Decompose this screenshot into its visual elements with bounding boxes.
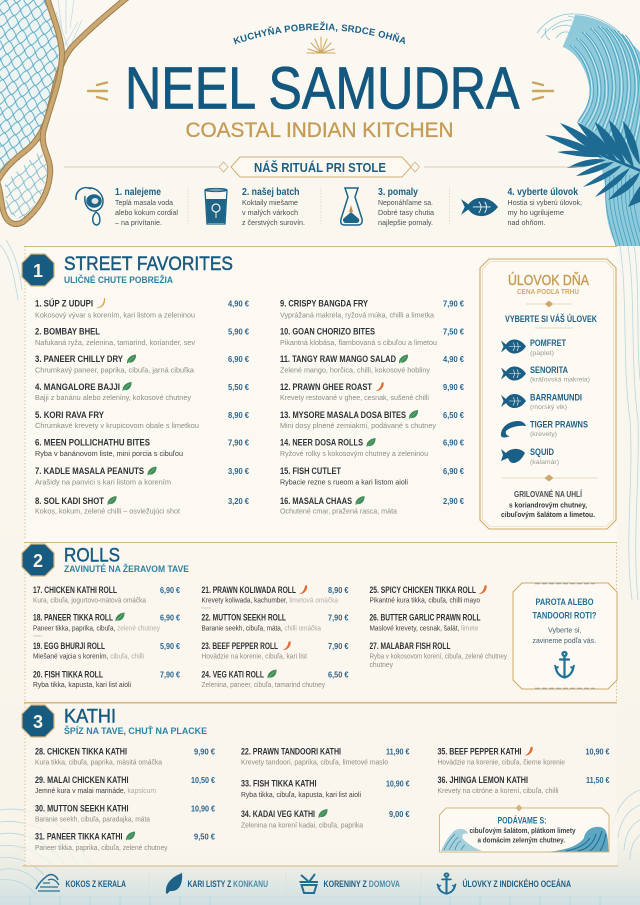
item 29 — [35, 775, 215, 795]
ritual banner — [64, 157, 584, 177]
badge 2: 2 — [33, 551, 43, 571]
item 4: 5,50 € — [228, 383, 249, 392]
catch: pomfret — [501, 338, 566, 357]
item 16: 2,90 € — [443, 497, 464, 506]
item 12: Krevety restované v ghee, cesnak, sušené chilli — [280, 395, 429, 402]
callout: served with: PODÁVAME S: — [498, 816, 546, 826]
title ornament right — [533, 82, 553, 100]
item 32: 22. PRAWN TANDOORI KATHI — [241, 746, 341, 756]
item 25 — [370, 585, 487, 604]
item 4: 4. MANGALORE BAJJI — [35, 382, 120, 392]
step 1: Teplá masala voda — [115, 200, 173, 207]
item 2: 2. BOMBAY BHEL — [35, 326, 101, 336]
item 33: 33. FISH TIKKA KATHI — [241, 778, 316, 788]
item 36: Krevety na citróne a korení, cibuľa, chilli — [438, 788, 559, 795]
item 15 — [280, 466, 464, 486]
item 14: 6,90 € — [443, 438, 464, 448]
item 22: Baranie seekh, cibuľa, mäta, chilli omáčka — [202, 626, 321, 632]
item 7: 3,90 € — [228, 467, 249, 476]
item 25: 25. SPICY CHICKEN TIKKA ROLL — [370, 585, 476, 595]
item 5 — [35, 410, 249, 430]
step 1: – na privítanie. — [115, 220, 162, 227]
item 18 — [33, 612, 180, 638]
callout: served with: a domácim zeleným chutney. — [478, 836, 565, 844]
grilled note: cibuľovým šalátom a limetou. — [501, 510, 595, 519]
subheading: ŠPÍZ NA TAVE, CHUŤ NA PLACKE — [64, 725, 207, 736]
heading: catch of the day: ÚLOVOK DŇA — [508, 272, 589, 289]
item 36: 36. JHINGA LEMON KATHI — [438, 775, 528, 785]
item 24 — [202, 670, 349, 689]
step 2: z čerstvých surovín. — [242, 220, 305, 227]
icon: anchor — [554, 652, 574, 678]
step 4 — [461, 187, 582, 227]
item 36 — [438, 775, 610, 795]
item 17: Kura, cibuľa, jogurtovo-mätová omáčka — [33, 598, 146, 604]
subheading: ZAVINUTÉ NA ŽERAVOM TAVE — [64, 563, 189, 574]
item 31 — [35, 832, 215, 852]
callout: parota or roti: Vyberte si, — [548, 626, 582, 634]
catch: squid: SQUID — [530, 447, 554, 457]
item 11 — [280, 354, 464, 374]
item 24: 24. VEG KATI ROLL — [202, 670, 264, 680]
item 9: 7,90 € — [443, 300, 464, 308]
title: NEEL SAMUDRA — [125, 56, 520, 122]
icon: carafe — [341, 188, 362, 225]
item 2: Nafukaná ryža, zelenina, tamarind, koriander, sev — [35, 340, 196, 347]
panel: rolls — [22, 542, 618, 894]
heading: rolls: ROLLS — [64, 546, 120, 566]
item 32 — [241, 746, 410, 766]
item 23: Hovädzie na korenie, cibuľa, kari list — [202, 654, 307, 660]
item 13: 13. MYSORE MASALA DOSA BITES — [280, 410, 406, 420]
item 1: Kokosový vývar s korením, kari listom a zeleninou — [35, 312, 195, 320]
item 32: 11,90 € — [386, 748, 410, 756]
item 15: 6,90 € — [443, 467, 464, 476]
catch: senorita: SENORITA — [530, 365, 568, 375]
item 28: 28. CHICKEN TIKKA KATHI — [35, 746, 127, 756]
tagline: KUCHYŇA POBREŽIA, SRDCE OHŇA — [233, 22, 405, 44]
item 29: 10,50 € — [191, 776, 215, 785]
decoration: rope — [0, 0, 128, 224]
item 10: 10. GOAN CHORIZO BITES — [280, 326, 375, 336]
item 29: Jemné kura v malai marináde, kapsicum — [35, 788, 156, 795]
badge 2 — [22, 544, 54, 576]
step 1: alebo kokum cordial — [115, 210, 178, 217]
item 8: 3,20 € — [228, 497, 249, 506]
panel: kathi — [22, 703, 618, 866]
item 18: Paneer tikka, paprika, cibuľa, zelené chutney — [33, 626, 161, 632]
step 3: najlepšie pomaly. — [378, 220, 433, 227]
item 6: 6. MEEN POLLICHATHU BITES — [35, 438, 150, 448]
item 7: 7. KADLE MASALA PEANUTS — [35, 466, 144, 476]
item 36: 11,50 € — [586, 776, 610, 785]
item 12: 9,90 € — [443, 383, 464, 392]
item 34: Zelenina na korení kadai, cibuľa, paprika — [241, 822, 363, 830]
callout: parota or roti: PAROTA ALEBO — [536, 597, 594, 607]
icon: mortar — [300, 874, 318, 893]
catch: tiger prawns: (krevety) — [530, 431, 557, 438]
item 13: 6,50 € — [443, 411, 464, 420]
item 33: 10,90 € — [386, 780, 410, 788]
item 14: 14. NEER DOSA ROLLS — [280, 438, 363, 448]
subheading: ULIČNÉ CHUTE POBREŽIA — [64, 274, 173, 285]
badge 1: 1 — [33, 261, 43, 281]
catch: barramundi: BARRAMUNDI — [530, 392, 582, 402]
grilled note: GRILOVANÉ NA UHLÍ — [514, 490, 583, 499]
panel: street favorites — [22, 246, 617, 542]
item 33: Ryba tikka, cibuľa, kapusta, kari list aioli — [241, 792, 361, 799]
item 27 — [370, 641, 507, 669]
item 19 — [33, 641, 180, 660]
item 10 — [280, 326, 464, 347]
item 3: 6,90 € — [228, 355, 249, 364]
item 1: 4,90 € — [228, 300, 249, 308]
item 23 — [202, 641, 349, 660]
step 4: my ho ugrilujeme — [508, 210, 564, 217]
step 4: nad ohňom. — [508, 220, 546, 227]
item 6: Ryba v banánovom liste, mini porcia s cibuľou — [35, 451, 183, 458]
catch: pomfret: (paplet) — [530, 350, 554, 357]
item 35 — [438, 746, 610, 766]
item 23: 7,90 € — [328, 642, 349, 651]
item 8: 8. SOL KADI SHOT — [35, 496, 105, 506]
step 3: Neponáhľame sa. — [378, 200, 433, 207]
item 12 — [280, 382, 464, 402]
item 31: 9,50 € — [194, 832, 215, 842]
item 5: Chrumkavé krevety v krupicovom obale s limetkou — [35, 423, 199, 430]
market price note: CENA PODĽA TRHU — [517, 289, 579, 296]
item 11: Zelené mango, horčica, chilli, kokosové hobliny — [280, 368, 431, 374]
step 4: 4. vyberte úlovok — [508, 187, 578, 198]
heading: kathi: KATHI — [64, 706, 116, 728]
catch: senorita — [501, 365, 590, 384]
item 21: Krevety koliwada, kachumber, limetová omáčka — [202, 598, 338, 604]
wave illustration left — [441, 829, 482, 851]
step 3: 3. pomaly — [378, 187, 418, 198]
item 34 — [241, 809, 410, 830]
item 18: Naan — [33, 633, 43, 638]
item 21: 8,90 € — [328, 586, 349, 595]
item 20: 7,90 € — [160, 670, 180, 680]
item 16: Ochutené cmar, pražená rasca, mäta — [280, 508, 397, 516]
item 6: 7,90 € — [228, 438, 249, 448]
footer: origins strip — [36, 872, 572, 894]
item 27: 27. MALABAR FISH ROLL — [370, 641, 451, 651]
item 21: 21. PRAWN KOLIWADA ROLL — [202, 585, 296, 595]
item 7: Arašidy na panvici s kari listom a korením — [35, 480, 171, 486]
catch: pomfret: POMFRET — [530, 338, 566, 348]
item 30: 10,90 € — [191, 804, 215, 814]
badge 1 — [22, 254, 54, 286]
subtitle: COASTAL INDIAN KITCHEN — [186, 119, 454, 142]
item 19: 19. EGG BHURJI ROLL — [33, 641, 105, 651]
callout: served with — [440, 804, 609, 852]
step 1 — [76, 187, 178, 227]
item 10: Pikantná klobása, flambovaná s cibuľou a limetou — [280, 340, 437, 347]
item 5: 5. KORI RAVA FRY — [35, 410, 104, 420]
item 35: 10,90 € — [586, 748, 610, 756]
icon: curry leaf — [166, 873, 182, 894]
item 6 — [35, 438, 249, 458]
item 20 — [33, 670, 180, 689]
item 17: 17. CHICKEN KATHI ROLL — [33, 585, 117, 595]
item 18: 6,90 € — [160, 614, 180, 622]
item 33 — [241, 778, 410, 799]
item 22 — [202, 612, 349, 632]
badge 3: 3 — [33, 712, 43, 732]
item 29: 29. MALAI CHICKEN KATHI — [35, 775, 128, 785]
step 3: Dobré tasy chutia — [378, 210, 434, 217]
panel: catch of the day — [480, 259, 616, 529]
label: konkan: KARI LISTY Z KONKANU — [188, 879, 268, 889]
item 32: Krevety tandoori, paprika, cibuľa, limetové maslo — [241, 760, 388, 766]
grilled note — [501, 490, 595, 519]
item 9: Vyprážaná makrela, ryžová múka, chilli a limetka — [280, 312, 434, 320]
callout: parota or roti: TANDOORI ROTI? — [532, 610, 597, 620]
step 3 — [341, 187, 434, 227]
item 22: 7,90 € — [328, 614, 349, 622]
item 5: 8,90 € — [228, 411, 249, 420]
item 4: Bajji z banánu alebo zeleniny, kokosové chutney — [35, 395, 192, 402]
item 9 — [280, 298, 464, 320]
item 19: Miešané vajcia s korením, cibuľa, chilli — [33, 654, 144, 660]
item 28: Kura tikka, cibuľa, paprika, mäsitá omáčka — [35, 760, 162, 766]
item 11: 4,90 € — [443, 355, 464, 364]
item 26 — [370, 612, 481, 632]
item 12: 12. PRAWN GHEE ROAST — [280, 382, 373, 392]
step 1: 1. nalejeme — [115, 187, 161, 198]
item 16: 16. MASALA CHAAS — [280, 496, 352, 506]
item 24: Zelenina, paneer, cibuľa, tamarind chutney — [202, 682, 326, 689]
decoration: palm leaf — [545, 120, 640, 207]
decoration: margin wave lines — [0, 240, 640, 905]
icon: fish — [461, 198, 498, 216]
item 3: 3. PANEER CHILLY DRY — [35, 354, 123, 364]
item 28 — [35, 746, 215, 766]
item 35: Hovädzie na korenie, cibuľa, čierne korenie — [438, 760, 565, 766]
icon: footer anchor — [437, 873, 456, 894]
catch: barramundi: (morský vlk) — [530, 404, 567, 411]
item 19: 5,90 € — [160, 642, 180, 651]
item 20: Ryba tikka, kapusta, kari list aioli — [33, 682, 131, 689]
icon: glass — [205, 188, 227, 224]
item 30 — [35, 804, 215, 824]
item 2: 5,90 € — [228, 328, 249, 336]
item 15: 15. FISH CUTLET — [280, 466, 342, 476]
item 30: Baranie seekh, cibuľa, paradajka, mäta — [35, 816, 150, 824]
catch: squid — [501, 447, 559, 466]
item 34: 9,00 € — [389, 810, 410, 819]
item 3 — [35, 354, 249, 374]
callout: parota or roti — [513, 583, 617, 689]
step 2: v malých várkoch — [242, 210, 298, 217]
label: kerala: KOKOS Z KERALA — [66, 879, 126, 889]
item 27: Ryba v kokosovom korení, cibuľa, zelené chutney — [370, 654, 507, 660]
icon: pouring vessel — [76, 188, 103, 225]
item 31: 31. PANEER TIKKA KATHI — [35, 832, 122, 842]
icon: coconut wave — [36, 875, 60, 891]
item 20: 20. FISH TIKKA ROLL — [33, 670, 103, 680]
title ornament left — [88, 82, 107, 100]
heading: street favorites: STREET FAVORITES — [64, 254, 233, 275]
callout: served with: cibuľovým šalátom, plátkom limety — [470, 826, 576, 835]
icon: gold sunburst — [307, 37, 335, 53]
item 22: 22. MUTTON SEEKH ROLL — [202, 612, 286, 622]
item 14 — [280, 438, 464, 458]
step 2: 2. našej batch — [242, 187, 300, 198]
step 4: Hostia si vyberú úlovok, — [508, 200, 582, 207]
item 8 — [35, 496, 249, 516]
item 13 — [280, 410, 464, 430]
label: ocean: ÚLOVKY Z INDICKÉHO OCEÁNA — [462, 878, 572, 889]
item 15: Rybacie rezne s rueom a kari listom aioli — [280, 480, 408, 486]
catch: tiger prawns: TIGER PRAWNS — [530, 420, 588, 430]
item 27: chutney — [370, 662, 394, 669]
decoration: fishing net — [0, 0, 82, 220]
item 2 — [35, 326, 249, 347]
catch: barramundi — [501, 392, 582, 411]
catch: senorita: (kráľovská makrela) — [530, 376, 590, 384]
item 34: 34. KADAI VEG KATHI — [241, 809, 315, 819]
step 2: Koktaily miešame — [242, 200, 298, 207]
ritual banner: NÁŠ RITUÁL PRI STOLE — [254, 160, 386, 175]
item 17 — [33, 585, 180, 604]
item 1: 1. SÚP Z UDUPI — [35, 298, 93, 308]
item 30: 30. MUTTON SEEKH KATHI — [35, 804, 128, 814]
catch: tiger prawns — [501, 420, 588, 438]
item 21: Naan — [202, 605, 211, 610]
item 9: 9. CRISPY BANGDA FRY — [280, 298, 368, 308]
badge 3 — [22, 705, 54, 737]
callout: parota or roti: zavineme podľa vás. — [532, 636, 596, 645]
grilled note: s koriandrovým chutney, — [509, 500, 587, 510]
item 13: Mini dosy plnené zemiakmi, podávané s chutney — [280, 423, 437, 430]
item 23: 23. BEEF PEPPER ROLL — [202, 641, 278, 651]
item 3: Chrumkavý paneer, paprika, cibuľa, jarná cibuľka — [35, 368, 194, 374]
decoration: ocean wave — [537, 14, 640, 246]
item 26: 26. BUTTER GARLIC PRAWN ROLL — [370, 612, 481, 622]
item 1 — [35, 298, 249, 320]
item 11: 11. TANGY RAW MANGO SALAD — [280, 354, 396, 364]
label: spices: KORENINY Z DOMOVA — [324, 879, 401, 889]
item 24: 6,50 € — [328, 670, 349, 680]
item 10: 7,50 € — [443, 328, 464, 336]
wave illustration right — [550, 827, 608, 852]
item 8: Kokos, kokum, zelené chilli – osviežujúci shot — [35, 508, 180, 516]
item 17: 6,90 € — [160, 586, 180, 595]
item 28: 9,90 € — [194, 748, 215, 756]
step 2 — [205, 187, 305, 227]
catch: squid: (kalamár) — [530, 459, 559, 466]
item 18: 18. PANEER TIKKA ROLL — [33, 612, 113, 622]
item 31: Paneer tikka, paprika, cibuľa, zelené chutney — [35, 845, 168, 852]
item 35: 35. BEEF PEPPER KATHI — [438, 746, 522, 756]
item 26: Maslové krevety, cesnak, šalát, limete — [370, 626, 479, 632]
item 25: Pikantné kura tikka, cibuľa, chilli mayo — [370, 598, 480, 604]
choose prompt: VYBERTE SI VÁŠ ÚLOVEK — [505, 313, 597, 325]
item 7 — [35, 466, 249, 486]
item 14: Ryžové rolky s kokosovým chutney a zeleninou — [280, 451, 428, 458]
item 21 — [202, 585, 349, 610]
item 16 — [280, 496, 464, 516]
item 4 — [35, 382, 249, 402]
